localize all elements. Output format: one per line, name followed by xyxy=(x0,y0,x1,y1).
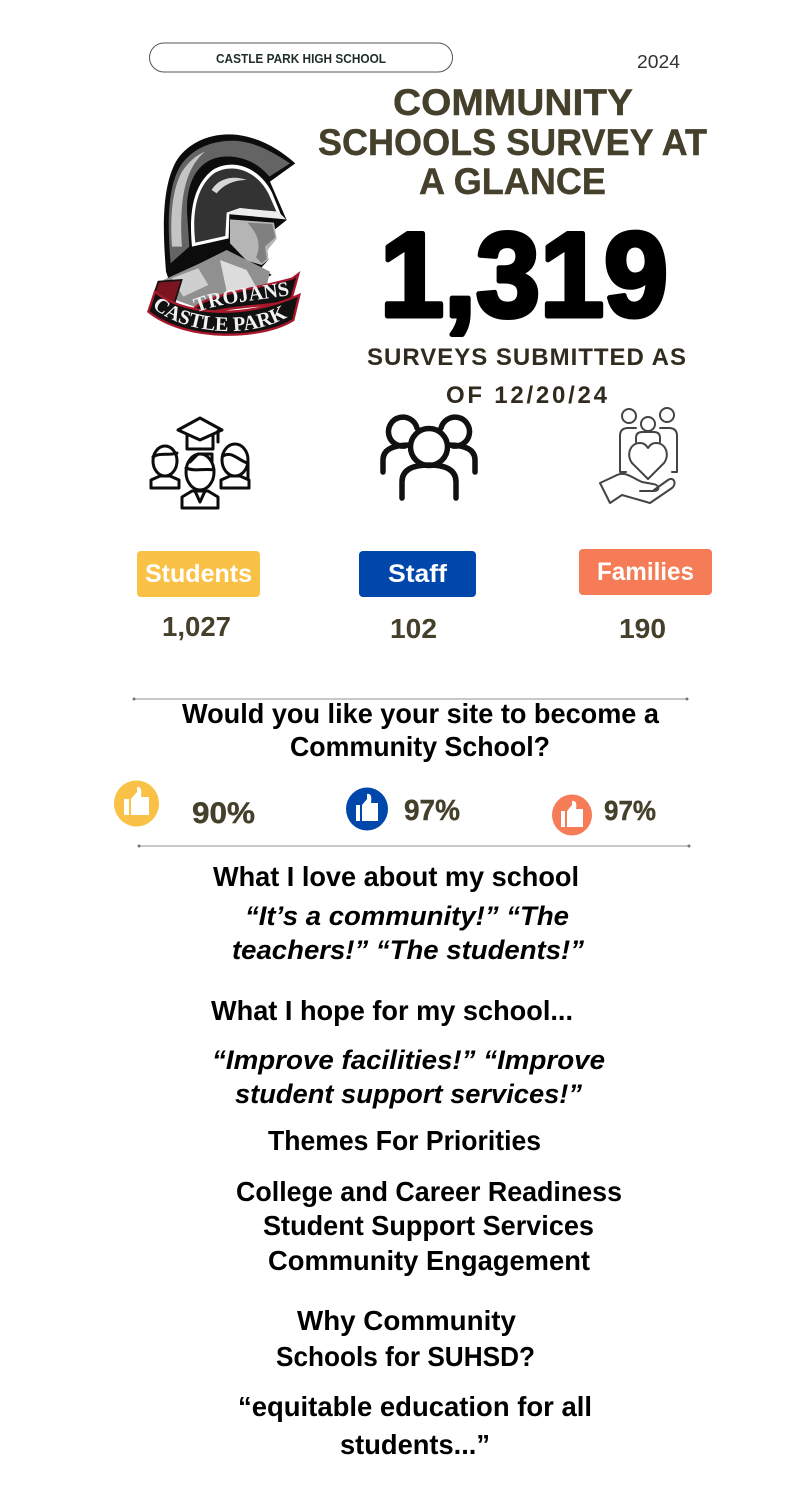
title: A GLANCE xyxy=(419,161,606,202)
count: families: 190 xyxy=(619,613,666,644)
closing quote xyxy=(238,1391,592,1460)
icon: students xyxy=(151,418,249,508)
logo banner text: CASTLE PARK xyxy=(154,298,288,332)
closing quote: “equitable education for all xyxy=(238,1391,592,1422)
title: SCHOOLS SURVEY AT xyxy=(318,122,707,163)
quote: love: teachers!” “The students!” xyxy=(232,935,584,965)
question heading: Would you like your site to become a xyxy=(182,698,659,729)
icon: staff xyxy=(383,417,475,498)
logo banner text xyxy=(154,282,288,332)
button: staff xyxy=(359,551,476,597)
icon: blue thumbs up xyxy=(346,788,388,830)
count: students: 1,027 xyxy=(162,611,231,642)
heading: themes: Themes For Priorities xyxy=(268,1125,541,1156)
quote: hope: student support services!” xyxy=(235,1079,583,1109)
subtitle: SURVEYS SUBMITTED AS xyxy=(367,344,686,371)
list: themes: College and Career Readiness xyxy=(236,1176,622,1207)
logo banner text: TROJANS xyxy=(192,282,288,312)
quote: hope: “Improve facilities!” “Improve xyxy=(212,1045,605,1075)
list: themes: Community Engagement xyxy=(268,1245,590,1276)
count: staff: 102 xyxy=(390,613,437,644)
icon: families xyxy=(600,408,677,503)
quote: love: “It’s a community!” “The xyxy=(245,901,569,931)
percent: students: 90% xyxy=(192,797,255,830)
big number: 1,319 xyxy=(380,208,668,342)
button: families: Families xyxy=(597,558,694,586)
button: families xyxy=(579,549,712,595)
heading: why community schools: Schools for SUHSD? xyxy=(276,1341,535,1372)
heading: why community schools xyxy=(276,1305,535,1372)
icon: yellow thumbs up xyxy=(114,780,159,826)
school name pill xyxy=(150,43,452,72)
quote: hope xyxy=(212,1045,605,1109)
list: themes: Student Support Services xyxy=(263,1210,594,1241)
question heading: Community School? xyxy=(290,731,550,762)
heading: what I hope: What I hope for my school... xyxy=(211,995,573,1026)
list: themes xyxy=(236,1176,622,1276)
title: COMMUNITY xyxy=(393,82,633,123)
question heading xyxy=(182,698,659,762)
quote: love xyxy=(232,901,584,965)
percent: families: 97% xyxy=(604,795,656,826)
title xyxy=(318,82,707,202)
heading: why community schools: Why Community xyxy=(297,1305,516,1336)
percent: staff: 97% xyxy=(404,795,460,827)
button: students: Students xyxy=(145,560,252,588)
icon: orange thumbs up xyxy=(552,794,592,836)
closing quote: students...” xyxy=(340,1429,490,1460)
logo: Castle Park Trojans xyxy=(147,134,301,336)
heading: what I love: What I love about my school xyxy=(213,861,579,892)
year: 2024 xyxy=(637,52,680,72)
button: students xyxy=(137,551,260,597)
subtitle: OF 12/20/24 xyxy=(446,382,608,409)
school name pill: CASTLE PARK HIGH SCHOOL xyxy=(216,52,386,66)
button: staff: Staff xyxy=(388,560,448,588)
subtitle xyxy=(367,344,686,409)
